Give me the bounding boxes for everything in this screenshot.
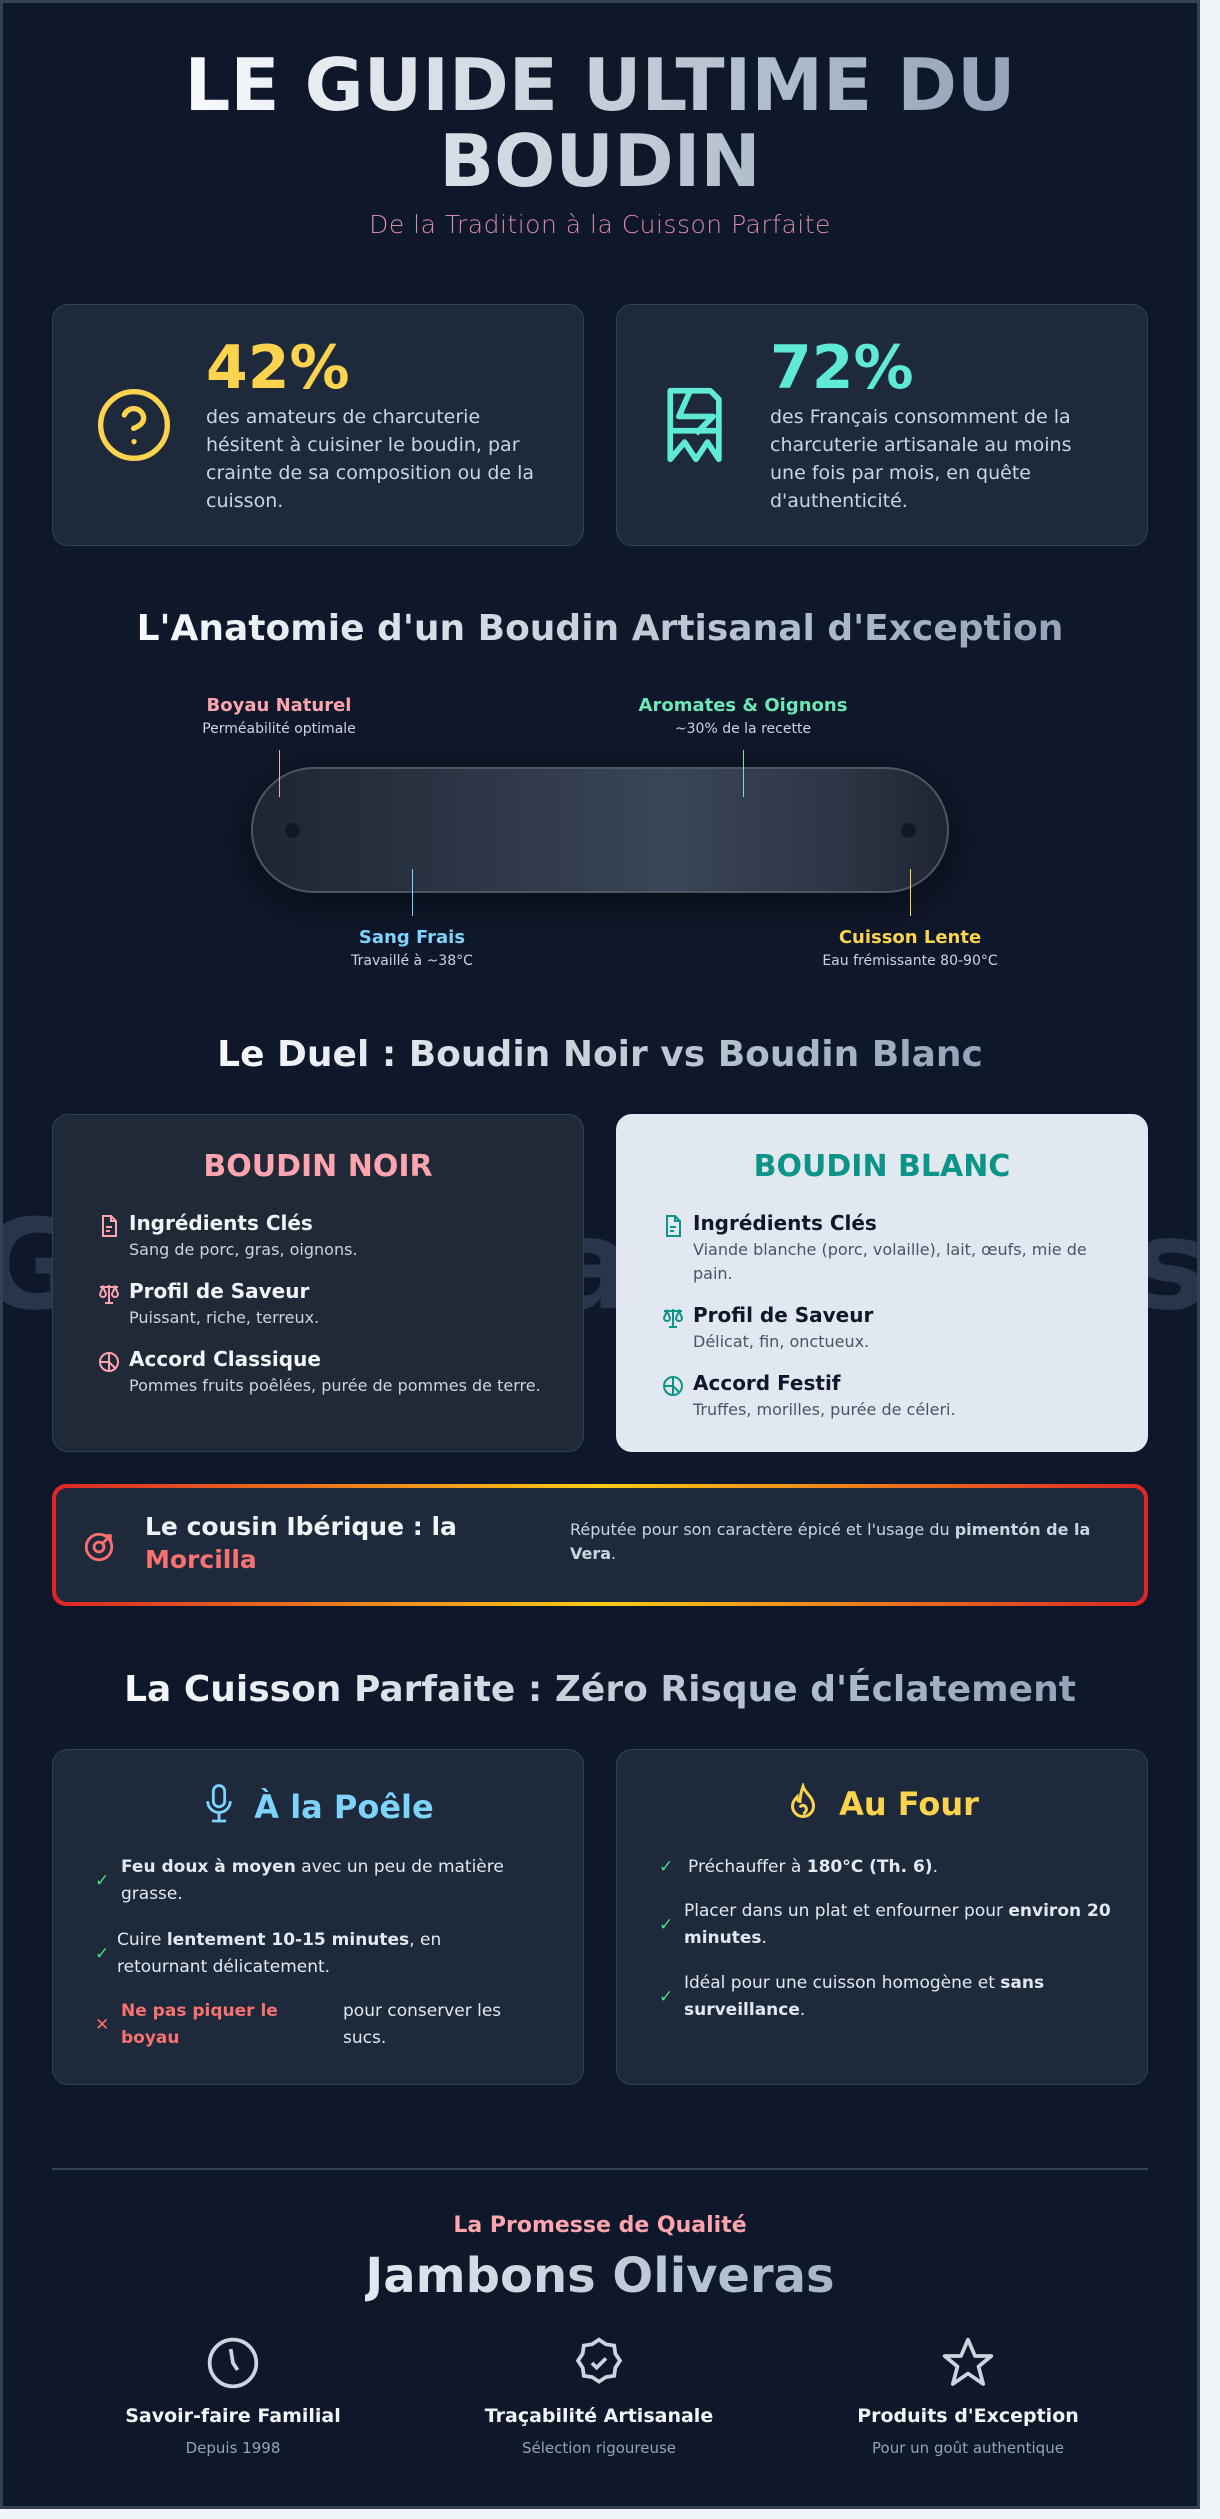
label: aromates: ~30% de la recette <box>675 721 811 737</box>
item: ingredients: Viande blanche (porc, volaille), lait, œufs, mie de pain. <box>693 1240 1087 1283</box>
panel: poele: Cuire lentement 10-15 minutes, en retournant délicatement. <box>117 1930 441 1977</box>
item: saveur <box>99 1279 319 1327</box>
panel: poele: ✓ <box>95 1871 109 1891</box>
callout: morcilla <box>52 1484 1148 1606</box>
icon: question <box>98 389 170 461</box>
subtitle: De la Tradition à la Cuisson Parfaite <box>369 210 831 239</box>
stat number: 72% <box>770 333 914 403</box>
heading: anatomie: L'Anatomie d'un Boudin Artisanal d'Exception <box>137 608 1063 649</box>
item: saveur: Profil de Saveur <box>129 1279 309 1303</box>
callout title: Morcilla <box>145 1545 257 1574</box>
item: ingredients: Sang de porc, gras, oignons. <box>129 1240 358 1259</box>
panel: poele: ✕ <box>95 2015 109 2035</box>
icon: star <box>942 2338 994 2386</box>
title: LE GUIDE ULTIME DU <box>185 43 1015 127</box>
item: ingredients: Ingrédients Clés <box>129 1211 313 1235</box>
item: saveur: Puissant, riche, terreux. <box>129 1308 319 1327</box>
card title: BOUDIN NOIR <box>203 1149 433 1184</box>
panel: poele <box>52 1749 584 2085</box>
panel: boudin blanc <box>616 1114 1148 1452</box>
title: BOUDIN <box>439 119 761 203</box>
item: accord <box>99 1347 541 1395</box>
footer: feature tracabilite <box>484 2338 713 2457</box>
heading: cuisson: La Cuisson Parfaite : Zéro Risque d'Éclatement <box>124 1669 1076 1710</box>
label: boyau: Perméabilité optimale <box>202 721 356 737</box>
panel: stat 42% <box>52 304 584 546</box>
list: Feu doux à moyen avec un peu de matière grasse. <box>121 1857 504 1904</box>
title <box>185 43 1015 203</box>
panel: four: ✓ <box>659 1915 673 1935</box>
icon: seal check <box>576 2338 622 2384</box>
panel: poele: Ne pas piquer le boyau <box>121 2001 278 2048</box>
panel: stat 72% <box>616 304 1148 546</box>
item: accord: Accord Classique <box>129 1347 321 1371</box>
diagram: boudin: Travaillé à ~38°C <box>351 953 473 969</box>
item: saveur <box>663 1303 874 1351</box>
divider <box>52 2168 1148 2170</box>
stat text: des Français consomment de la charcuterie artisanale au moins une fois par mois, en quête d'authenticité. <box>770 406 1071 512</box>
icon: target <box>84 1532 114 1562</box>
icon: badge <box>667 388 722 462</box>
label: boyau <box>202 695 356 737</box>
item: ingredients <box>102 1211 358 1259</box>
item: ingredients <box>666 1211 1087 1283</box>
heading: duel: Le Duel : Boudin Noir vs Boudin Blanc <box>217 1034 983 1075</box>
diagram: boudin: Sang Frais <box>359 927 465 948</box>
item: saveur: Délicat, fin, onctueux. <box>693 1332 869 1351</box>
panel: four: Idéal pour une cuisson homogène et sans surveillance. <box>684 1973 1044 2020</box>
footer: feature family <box>125 2338 341 2457</box>
footer: feature exception: Pour un goût authentique <box>872 2439 1064 2457</box>
item: saveur: Profil de Saveur <box>693 1303 873 1327</box>
footer: feature tracabilite: Traçabilité Artisanale <box>485 2405 713 2427</box>
label: boyau: Boyau Naturel <box>207 695 351 716</box>
panel: four <box>616 1749 1148 2085</box>
label: cuisson <box>910 869 911 916</box>
label: aromates: Aromates & Oignons <box>639 695 847 716</box>
card header: À la Poêle <box>254 1788 434 1826</box>
stat number: 42% <box>206 333 350 403</box>
diagram: boudin <box>202 695 998 969</box>
panel: four: ✓ <box>659 1857 673 1877</box>
card title: BOUDIN BLANC <box>754 1149 1010 1184</box>
callout text: Réputée pour son caractère épicé et l'usage du pimentón de la Vera. <box>570 1520 1090 1563</box>
footer: feature family: Depuis 1998 <box>186 2439 280 2457</box>
footer: feature tracabilite: Sélection rigoureuse <box>522 2439 676 2457</box>
callout title: Le cousin Ibérique : la <box>145 1512 457 1541</box>
panel: four: ✓ <box>659 1987 673 2007</box>
card header: Au Four <box>839 1785 979 1823</box>
footer: promise label: La Promesse de Qualité <box>453 2213 747 2238</box>
label: aromates <box>638 695 847 737</box>
boudin shape <box>251 767 949 893</box>
item: accord: Pommes fruits poêlées, purée de pommes de terre. <box>129 1376 541 1395</box>
footer: feature exception: Produits d'Exception <box>857 2405 1079 2427</box>
callout title <box>145 1512 457 1574</box>
panel: boudin noir <box>52 1114 584 1452</box>
panel: four: Placer dans un plat et enfourner pour environ 20 minutes. <box>684 1901 1111 1948</box>
panel: poele: pour conserver les sucs. <box>343 2001 501 2048</box>
footer: feature family: Savoir-faire Familial <box>125 2405 341 2427</box>
item: ingredients: Ingrédients Clés <box>693 1211 877 1235</box>
stat text: des amateurs de charcuterie hésitent à cuisiner le boudin, par crainte de sa composition ou de la cuisson. <box>206 406 534 512</box>
item: accord <box>663 1371 956 1419</box>
footer: brand: Jambons Oliveras <box>365 2248 835 2304</box>
item: accord: Accord Festif <box>693 1371 841 1395</box>
list: Préchauffer à 180°C (Th. 6). <box>688 1857 938 1877</box>
diagram: boudin: Eau frémissante 80-90°C <box>822 953 998 969</box>
panel: poele: ✓ <box>95 1944 109 1964</box>
icon: clock <box>208 2338 258 2388</box>
label: sang <box>412 869 413 916</box>
diagram: boudin: Cuisson Lente <box>839 927 981 948</box>
item: accord: Truffes, morilles, purée de céleri. <box>693 1400 956 1419</box>
footer: feature exception <box>857 2338 1079 2457</box>
